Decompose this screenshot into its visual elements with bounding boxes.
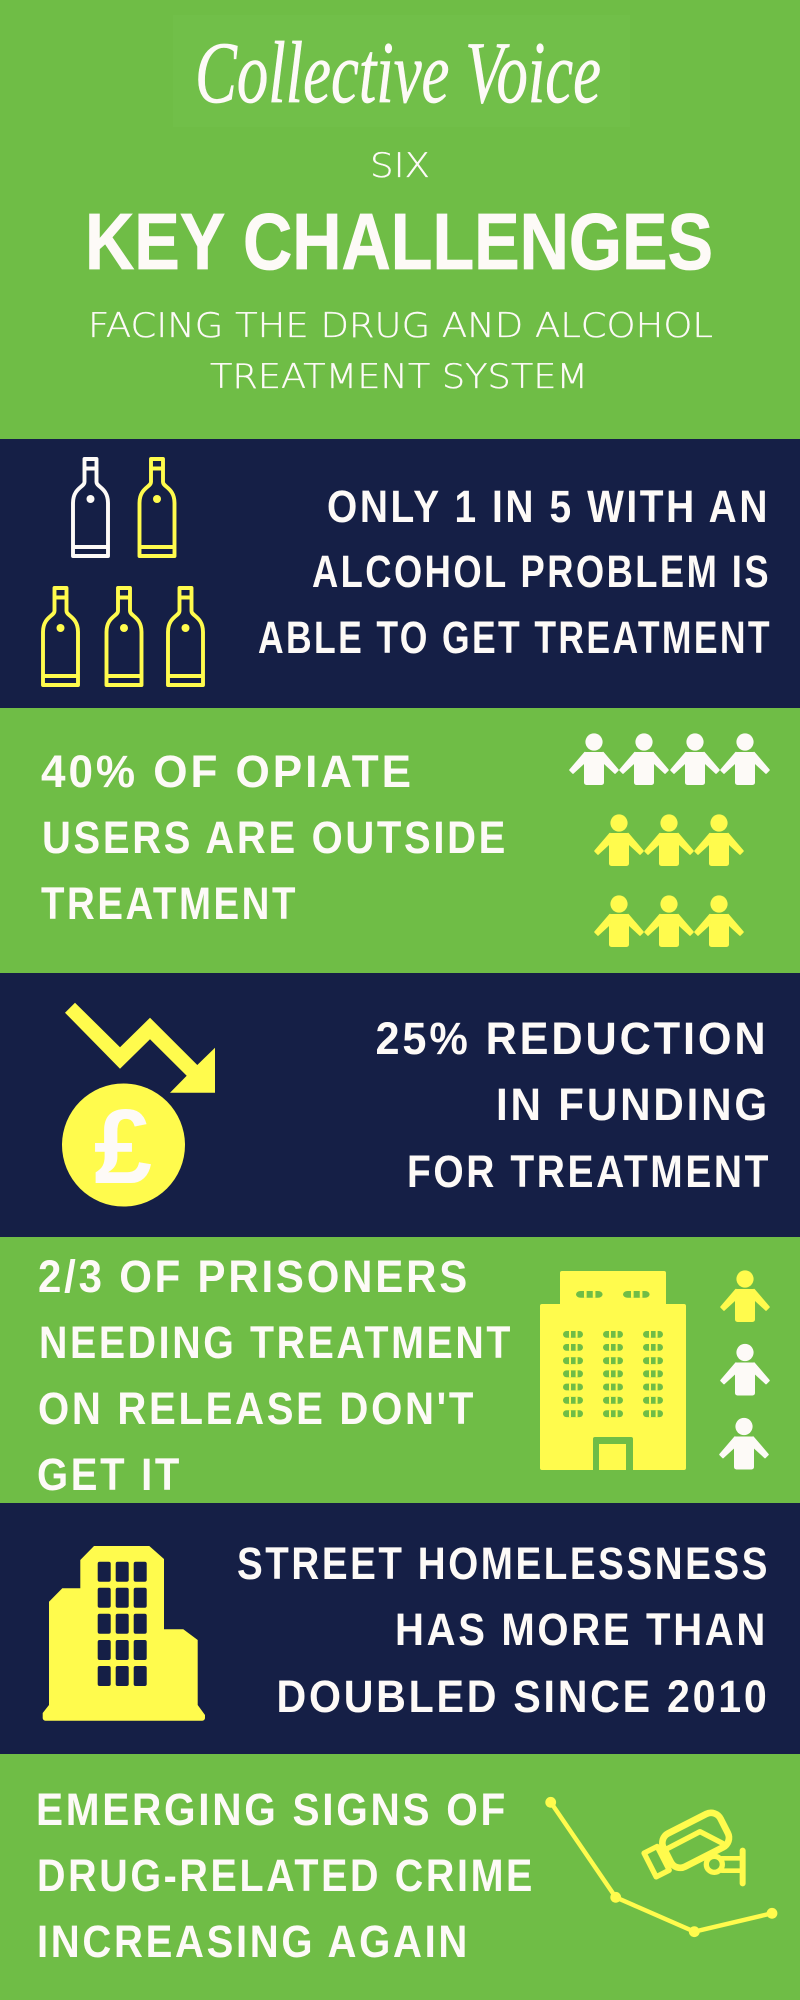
text: opiate statistic: TREATMENT — [41, 878, 298, 929]
icon: prison building — [540, 1271, 686, 1470]
text: crime statistic: INCREASING AGAIN — [37, 1916, 470, 1967]
icon: ten people — [570, 733, 769, 947]
text: opiate statistic — [41, 746, 508, 929]
icon: down arrow — [65, 1003, 215, 1093]
text: funding statistic: 25% REDUCTION — [376, 1013, 768, 1064]
chart: crime trend line — [545, 1797, 777, 1937]
text: prisoner statistic — [37, 1251, 513, 1500]
title: key challenges: KEY CHALLENGES — [85, 197, 713, 286]
subtitle — [88, 306, 713, 397]
text: crime statistic — [36, 1784, 535, 1967]
panel: alcohol treatment — [0, 439, 800, 708]
panel: header — [0, 0, 800, 439]
text: alcohol statistic — [258, 481, 772, 663]
heading: six: SIX — [370, 146, 430, 186]
text: funding statistic — [376, 1013, 771, 1197]
icon: pound coin — [62, 1084, 185, 1206]
icon: three prisoners — [720, 1270, 769, 1470]
text: opiate statistic: 40% OF OPIATE — [41, 746, 414, 797]
subtitle: TREATMENT SYSTEM — [210, 357, 588, 397]
icon: five bottles — [43, 459, 203, 685]
logo: Collective Voice: Collective Voice — [195, 25, 601, 122]
text: homelessness statistic: DOUBLED SINCE 2010 — [276, 1671, 770, 1722]
panel: homelessness — [0, 1503, 800, 1754]
icon: tower block — [43, 1546, 205, 1721]
text: homelessness statistic — [237, 1538, 770, 1722]
subtitle: FACING THE DRUG AND ALCOHOL — [88, 306, 713, 346]
text: opiate statistic: USERS ARE OUTSIDE — [42, 812, 508, 863]
icon: pound coin: £ — [94, 1088, 152, 1206]
text: prisoner statistic: ON RELEASE DON'T — [38, 1383, 476, 1434]
text: crime statistic: EMERGING SIGNS OF — [36, 1784, 508, 1835]
panel: funding — [0, 973, 800, 1237]
panel: prisoners — [0, 1237, 800, 1503]
logo background — [173, 15, 630, 127]
panel: opiate users — [0, 708, 800, 973]
icon: cctv camera — [644, 1809, 743, 1883]
text: prisoner statistic: GET IT — [37, 1449, 182, 1500]
text: crime statistic: DRUG-RELATED CRIME — [37, 1850, 535, 1901]
text: prisoner statistic: 2/3 OF PRISONERS — [38, 1251, 470, 1302]
text: funding statistic: IN FUNDING — [496, 1079, 770, 1130]
panel: crime — [0, 1754, 800, 2000]
text: prisoner statistic: NEEDING TREATMENT — [39, 1317, 513, 1368]
